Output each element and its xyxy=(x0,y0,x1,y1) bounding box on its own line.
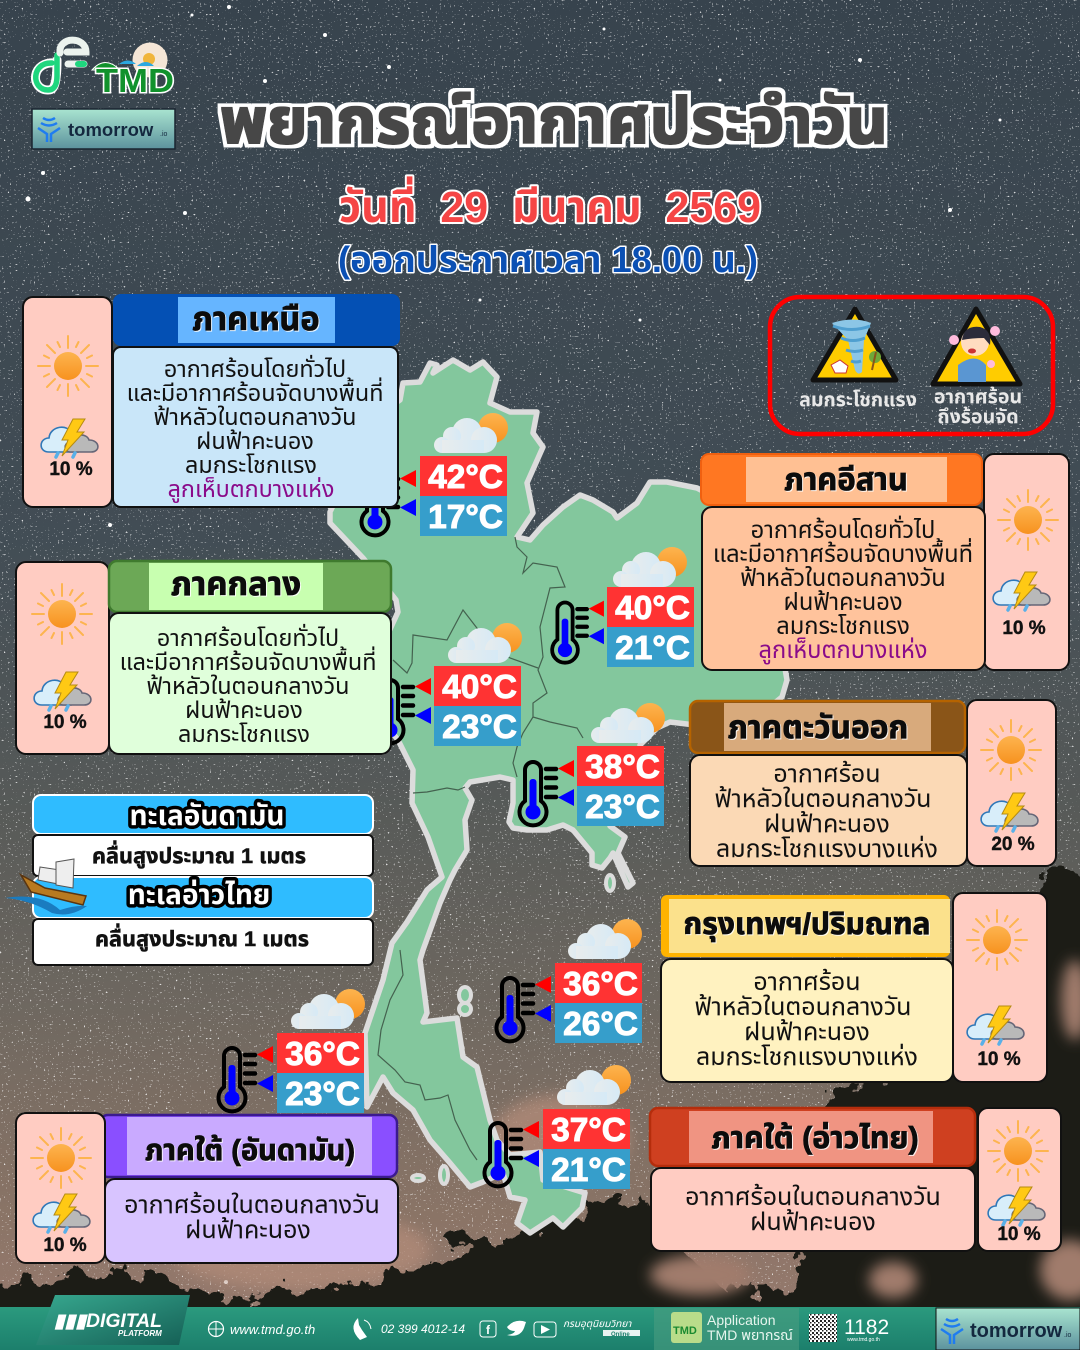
background: tree silhouettes xyxy=(0,850,1080,1350)
department online xyxy=(563,1319,640,1338)
heading central: ภาคกลาง xyxy=(171,565,301,602)
temperature east: 38°C xyxy=(585,749,660,786)
rain panel gulf: 10 % xyxy=(997,1224,1041,1245)
panel: south gulf xyxy=(650,1108,1061,1251)
text bangkok: ฝนฟ้าคะนอง xyxy=(744,1018,870,1046)
text Gulf sea xyxy=(33,919,373,965)
heading north: ภาคเหนือ xyxy=(192,301,320,337)
text gulf: อากาศร้อนในตอนกลางวัน xyxy=(685,1183,941,1211)
QR code xyxy=(809,1314,837,1342)
rain panel north xyxy=(23,297,112,507)
rain panel central xyxy=(16,562,109,754)
temperature andaman xyxy=(277,989,365,1113)
app panel: Application xyxy=(707,1312,776,1328)
title: พยากรณ์อากาศประจำวัน xyxy=(220,85,888,157)
text andaman xyxy=(105,1179,398,1263)
rain panel central: 10 % xyxy=(43,712,87,733)
text isan: ลูกเห็บตกบางแห่ง xyxy=(759,637,927,665)
hotline: www.tmd.go.th xyxy=(847,1337,880,1343)
temperature gulf xyxy=(543,1065,631,1189)
heading isan xyxy=(701,454,982,505)
text east: ฟ้าหลัวในตอนกลางวัน xyxy=(715,785,931,813)
temperature isan xyxy=(607,547,694,667)
text north: ลูกเห็บตกบางแห่ง xyxy=(168,476,334,504)
logos top left xyxy=(32,40,175,149)
department online: กรมอุตุนิยมวิทยา xyxy=(563,1319,632,1330)
heading andaman xyxy=(100,1115,397,1177)
panel: bangkok xyxy=(661,893,1047,1082)
text bangkok: ฟ้าหลัวในตอนกลางวัน xyxy=(695,993,911,1021)
logo: DE xyxy=(35,40,86,90)
logo: tomorrow.io: .io xyxy=(160,131,168,138)
decorative warm patches between trees xyxy=(650,960,1080,1300)
panel: sea xyxy=(5,795,373,965)
forecast isan: thermometer xyxy=(552,601,604,663)
rain panel bangkok xyxy=(953,893,1047,1082)
logo: digital platform xyxy=(36,1295,190,1345)
heading Gulf sea: ทะเลอ่าวไทย xyxy=(128,879,270,910)
app panel: TMD xyxy=(673,1325,697,1337)
text bangkok xyxy=(661,959,953,1082)
temperature gulf: 37°C xyxy=(551,1112,626,1149)
heading central xyxy=(109,561,391,612)
panel: isan xyxy=(701,454,1069,670)
map of Thailand xyxy=(330,360,787,1233)
forecast central: thermometer xyxy=(376,678,431,743)
panel: south andaman xyxy=(16,1113,398,1263)
forecast gulf: thermometer xyxy=(484,1121,539,1186)
heading bangkok xyxy=(661,895,950,957)
logo: tomorrow footer: tomorrow xyxy=(970,1320,1063,1342)
rain panel bangkok: 10 % xyxy=(977,1049,1021,1070)
icon: extreme heat warning xyxy=(933,309,1020,384)
social icons xyxy=(480,1321,556,1337)
forecast north: thermometer xyxy=(362,470,416,535)
text isan: และมีอากาศร้อนจัดบางพื้นที่ xyxy=(713,538,973,568)
forecast east: thermometer xyxy=(520,760,574,825)
text east: ลมกระโชกแรงบางแห่ง xyxy=(716,835,938,863)
text north: และมีอากาศร้อนจัดบางพื้นที่ xyxy=(127,377,383,406)
text central: ฝนฟ้าคะนอง xyxy=(185,697,303,723)
text north: ลมกระโชกแรง xyxy=(185,452,317,478)
text central: อากาศร้อนโดยทั่วไป xyxy=(157,623,339,651)
text bangkok: ลมกระโชกแรงบางแห่ง xyxy=(696,1043,918,1071)
logo: tomorrow.io xyxy=(32,109,175,149)
forecast bangkok: thermometer xyxy=(496,976,551,1041)
heading Gulf sea xyxy=(33,877,373,918)
temperature andaman: 23°C xyxy=(285,1076,360,1113)
heading andaman: ภาคใต้ (อันดามัน) xyxy=(145,1135,355,1167)
rain panel east xyxy=(967,700,1056,866)
text central: และมีอากาศร้อนจัดบางพื้นที่ xyxy=(120,646,376,675)
temperature east: 23°C xyxy=(585,789,660,826)
phone: 02 399 4012-14 xyxy=(381,1322,465,1336)
text isan: อากาศร้อนโดยทั่วไป xyxy=(751,515,935,544)
icon: strong wind warning xyxy=(813,309,896,380)
temperature north xyxy=(420,413,508,536)
text isan xyxy=(702,507,985,670)
text north xyxy=(113,347,398,507)
rain panel isan: 10 % xyxy=(1002,618,1046,639)
logo: digital platform: ▮▮▮DIGITAL xyxy=(54,1311,162,1332)
text east xyxy=(690,755,967,866)
text north: ฝนฟ้าคะนอง xyxy=(196,428,314,454)
text central: ลมกระโชกแรง xyxy=(178,721,310,747)
logo: tomorrow.io: tomorrow xyxy=(68,119,154,140)
text gulf: ฝนฟ้าคะนอง xyxy=(750,1208,876,1236)
logo: tomorrow footer: .io xyxy=(1064,1332,1072,1339)
temperature north: 17°C xyxy=(428,499,503,536)
temperature central: 40°C xyxy=(442,669,517,706)
text Andaman sea: คลื่นสูงประมาณ 1 เมตร xyxy=(92,840,306,869)
background: warm glow xyxy=(170,1095,630,1290)
heading gulf: ภาคใต้ (อ่าวไทย) xyxy=(711,1121,919,1155)
website: www.tmd.go.th xyxy=(230,1322,315,1337)
logo: TMD: TMD xyxy=(96,62,174,99)
temperature east xyxy=(577,703,665,826)
logo: tomorrow footer xyxy=(936,1308,1080,1350)
text isan: ลมกระโชกแรง xyxy=(776,614,910,640)
heading Andaman sea: ทะเลอันดามัน xyxy=(129,800,285,831)
rain panel north: 10 % xyxy=(49,459,93,480)
text Gulf sea: คลื่นสูงประมาณ 1 เมตร xyxy=(95,923,309,952)
heading east: ภาคตะวันออก xyxy=(728,709,908,745)
logo: digital platform: PLATFORM xyxy=(118,1329,162,1338)
heading north xyxy=(113,294,400,346)
social icons: f xyxy=(486,1323,491,1337)
temperature gulf: 21°C xyxy=(551,1152,626,1189)
text central: ฟ้าหลัวในตอนกลางวัน xyxy=(147,673,349,699)
temperature north: 42°C xyxy=(428,459,503,496)
date: วันที่ 29 มีนาคม 2569 xyxy=(339,176,761,232)
text east: ฝนฟ้าคะนอง xyxy=(764,810,890,838)
rain panel andaman xyxy=(16,1113,105,1263)
temperature bangkok: 36°C xyxy=(563,966,638,1003)
panel: warnings xyxy=(770,297,1053,434)
temperature isan: 21°C xyxy=(615,630,690,667)
issue time: (ออกประกาศเวลา 18.00 น.) xyxy=(338,239,758,280)
text andaman: อากาศร้อนในตอนกลางวัน xyxy=(124,1191,380,1219)
panel: east xyxy=(690,700,1056,866)
icon: ship xyxy=(5,859,87,914)
rain panel isan xyxy=(984,454,1069,670)
forecast andaman: thermometer xyxy=(218,1046,273,1111)
temperature andaman: 36°C xyxy=(285,1036,360,1073)
temperature central xyxy=(434,623,522,746)
rain panel andaman: 10 % xyxy=(43,1235,87,1256)
rain panel gulf xyxy=(978,1108,1061,1251)
heading Andaman sea xyxy=(33,795,373,834)
text central xyxy=(109,613,391,754)
text isan: ฝนฟ้าคะนอง xyxy=(783,590,903,616)
phone xyxy=(353,1318,465,1340)
warning label: heat 2: ถึงร้อนจัด xyxy=(937,406,1019,428)
panel: central xyxy=(16,561,391,754)
rain panel east: 20 % xyxy=(991,834,1035,855)
warning label: heat: อากาศร้อน xyxy=(934,386,1022,408)
text gulf xyxy=(651,1168,975,1251)
text Andaman sea xyxy=(33,835,373,876)
text north: ฟ้าหลัวในตอนกลางวัน xyxy=(154,404,356,430)
temperature isan: 40°C xyxy=(615,590,690,627)
warning label: wind: ลมกระโชกแรง xyxy=(799,389,917,411)
logo: TMD xyxy=(92,42,174,99)
heading gulf xyxy=(650,1108,975,1166)
temperature central: 23°C xyxy=(442,709,517,746)
text east: อากาศร้อน xyxy=(773,760,881,788)
temperature bangkok xyxy=(555,919,642,1043)
heading isan: ภาคอีสาน xyxy=(784,462,908,497)
text andaman: ฝนฟ้าคะนอง xyxy=(185,1216,311,1244)
text north: อากาศร้อนโดยทั่วไป xyxy=(164,354,346,382)
text isan: ฟ้าหลัวในตอนกลางวัน xyxy=(740,566,946,592)
heading east xyxy=(690,701,965,753)
heading bangkok: กรุงเทพฯ/ปริมณฑล xyxy=(684,908,930,942)
app panel xyxy=(654,1308,799,1350)
hotline: 1182 xyxy=(844,1316,889,1339)
temperature bangkok: 26°C xyxy=(563,1006,638,1043)
footer xyxy=(0,1295,1080,1350)
app panel: TMD พยากรณ์ xyxy=(707,1327,793,1343)
department online: Online xyxy=(611,1332,630,1338)
panel: north xyxy=(23,294,400,507)
text bangkok: อากาศร้อน xyxy=(753,968,861,996)
